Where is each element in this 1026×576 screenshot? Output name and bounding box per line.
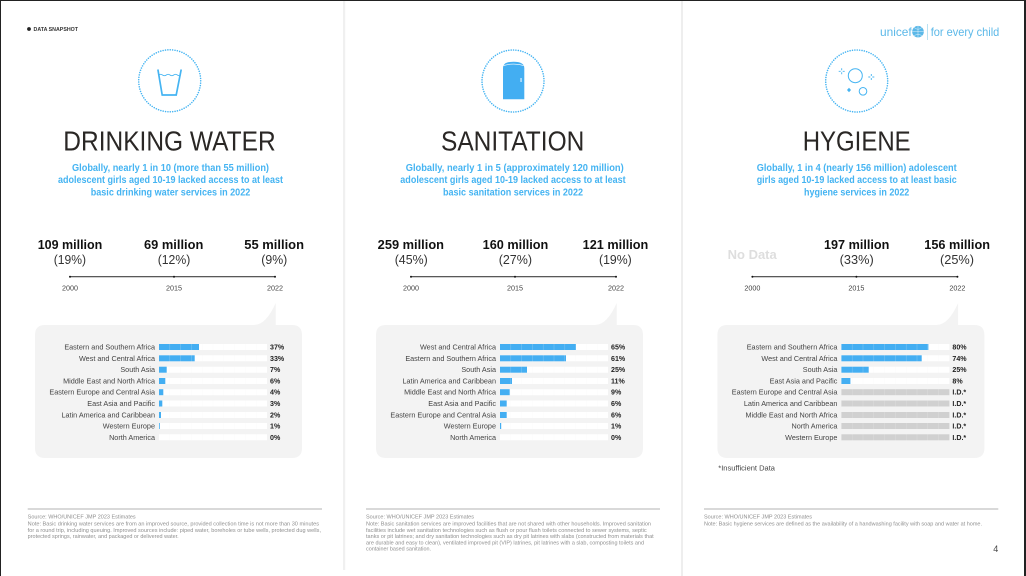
footnote: drinking water source and note: Note: Basic drinking water services are from an improved source, provided collection time is not more than 30 minutes	[28, 522, 320, 528]
text block: drinking water summary: adolescent girls aged 10-19 lacked access to at least	[58, 175, 284, 186]
bar chart: hygiene by region: 74%	[952, 355, 967, 363]
footnote: drinking water source and note: for a round trip, including queuing. Improved sources include: piped water, boreholes or tube wells, protected dug wells,	[28, 528, 321, 534]
timeline: drinking water: (19%)	[54, 253, 86, 267]
bar chart: sanitation by region: 6%	[611, 400, 622, 408]
bar chart: hygiene by region: Latin America and Caribbean	[744, 399, 837, 408]
bar chart: hygiene by region: I.D.*	[952, 422, 966, 430]
timeline: hygiene: 156 million	[924, 238, 990, 252]
bar chart: sanitation by region: 1%	[611, 422, 622, 430]
bar chart: drinking water by region: Middle East and North Africa	[63, 376, 156, 386]
bar chart: sanitation by region	[376, 303, 643, 458]
bar chart: drinking water by region: Eastern and Southern Africa	[64, 342, 156, 352]
timeline: sanitation: (45%)	[395, 253, 428, 267]
timeline: sanitation: (27%)	[499, 253, 532, 267]
heading: sanitation: SANITATION	[441, 126, 584, 157]
bar chart: drinking water by region: 7%	[270, 366, 281, 374]
bar chart: sanitation by region: North America	[450, 433, 497, 442]
bar chart: sanitation by region: West and Central Africa	[420, 342, 497, 352]
text block: sanitation summary: adolescent girls aged 10-19 lacked access to at least	[400, 175, 626, 186]
timeline: hygiene: 2015	[848, 284, 864, 293]
bar chart: drinking water by region	[35, 303, 302, 458]
text block: hygiene summary	[757, 163, 957, 198]
bar chart: sanitation by region: Middle East and North Africa	[404, 388, 497, 397]
timeline: drinking water: 2000	[62, 284, 78, 293]
text block: hygiene summary: hygiene services in 2022	[804, 187, 910, 198]
bar chart: sanitation by region: 25%	[611, 366, 626, 374]
timeline: hygiene: No Data	[728, 248, 778, 262]
timeline: sanitation: 2022	[608, 284, 624, 293]
timeline: drinking water: 69 million	[144, 238, 203, 252]
bar chart: drinking water by region: 4%	[270, 389, 281, 397]
bar chart: hygiene by region: South Asia	[803, 365, 838, 374]
icon: soap bubbles	[826, 50, 888, 112]
bar chart: hygiene by region: North America	[791, 422, 838, 430]
footnote: sanitation source and note: Source: WHO/UNICEF JMP 2023 Estimates	[366, 514, 475, 520]
bar chart: hygiene by region: 25%	[952, 366, 967, 374]
bar chart: drinking water by region: 3%	[270, 400, 281, 408]
timeline: drinking water: 2022	[267, 284, 283, 293]
note: insufficient data: *Insufficient Data	[718, 466, 775, 472]
bar chart: drinking water by region: 37%	[270, 344, 285, 352]
bar chart: drinking water by region: West and Central Africa	[79, 354, 156, 363]
timeline: sanitation: 121 million	[583, 238, 648, 252]
bar chart: hygiene by region: I.D.*	[952, 400, 966, 408]
footnote: drinking water source and note: protected springs, rainwater, and packaged or delivered water.	[28, 534, 179, 540]
footnote: sanitation source and note	[366, 508, 660, 553]
logo: unicef for every child: unicef	[880, 25, 912, 39]
bar chart: drinking water by region: 2%	[270, 412, 281, 420]
bar chart: hygiene by region	[717, 303, 984, 458]
timeline: drinking water: (9%)	[261, 253, 287, 267]
bar chart: sanitation by region: 6%	[611, 412, 622, 420]
text block: sanitation summary	[400, 163, 626, 198]
bar chart: sanitation by region: Eastern and Southern Africa	[405, 354, 497, 363]
bar chart: sanitation by region: East Asia and Pacific	[428, 399, 496, 408]
text block: drinking water summary	[58, 163, 284, 198]
section label: data snapshot: DATA SNAPSHOT	[34, 27, 78, 33]
timeline: hygiene: (25%)	[940, 253, 974, 267]
text block: sanitation summary: basic sanitation services in 2022	[443, 187, 583, 198]
footnote: sanitation source and note: are durable and easy to clean), ventilated improved pit (VIP) latrines, pit latrines with a slab, composting toilets and	[366, 540, 644, 546]
footnote: sanitation source and note: tanks or pit latrines; and dry sanitation technologies such as dry pit latrines with slabs (constructed from materials that	[366, 534, 654, 540]
heading: drinking water: DRINKING WATER	[63, 126, 276, 157]
bar chart: hygiene by region: Eastern and Southern Africa	[747, 342, 838, 352]
timeline: hygiene: 2022	[949, 284, 965, 293]
bar chart: hygiene by region: I.D.*	[952, 434, 966, 442]
timeline: drinking water: (12%)	[158, 253, 190, 267]
bar chart: drinking water by region: 0%	[270, 434, 281, 442]
panel: hygiene	[704, 50, 998, 528]
page number: 4	[993, 544, 998, 554]
timeline: sanitation: 2000	[403, 284, 419, 293]
text block: hygiene summary: Globally, 1 in 4 (nearly 156 million) adolescent	[757, 163, 957, 174]
bar chart: sanitation by region: Eastern Europe and Central Asia	[390, 410, 497, 420]
timeline: sanitation: 2015	[507, 284, 523, 293]
footnote: drinking water source and note	[28, 508, 322, 540]
bar chart: drinking water by region: 33%	[270, 355, 285, 363]
bar chart: drinking water by region: Western Europe	[103, 422, 155, 430]
icon: toilet door	[482, 50, 544, 112]
bar chart: drinking water by region: South Asia	[120, 365, 156, 374]
icon: water glass	[139, 50, 201, 112]
bar chart: hygiene by region: 80%	[952, 344, 967, 352]
bar chart: drinking water by region: 1%	[270, 422, 281, 430]
bar chart: sanitation by region: Western Europe	[444, 422, 496, 430]
timeline: drinking water	[38, 238, 304, 293]
timeline: drinking water: 2015	[166, 284, 182, 293]
timeline: hygiene: 2000	[744, 284, 760, 293]
bar chart: sanitation by region: Latin America and Caribbean	[402, 376, 496, 386]
bar chart: hygiene by region: Western Europe	[785, 433, 837, 442]
text block: sanitation summary: Globally, nearly 1 in 5 (approximately 120 million)	[406, 163, 624, 174]
bar chart: drinking water by region: North America	[109, 433, 156, 442]
footnote: sanitation source and note: Note: Basic sanitation services are improved facilities that are not shared with other households. Improved sanitation	[366, 522, 651, 528]
text block: drinking water summary: basic drinking water services in 2022	[91, 187, 251, 198]
timeline: sanitation	[378, 238, 648, 293]
text block: drinking water summary: Globally, nearly 1 in 10 (more than 55 million)	[72, 163, 269, 174]
bar chart: hygiene by region: 8%	[952, 378, 963, 386]
bar chart: hygiene by region: Middle East and North Africa	[746, 410, 838, 420]
timeline: hygiene	[728, 238, 990, 293]
timeline: hygiene: 197 million	[824, 238, 889, 252]
bar chart: hygiene by region: East Asia and Pacific	[770, 376, 838, 386]
footnote: hygiene source and note: Source: WHO/UNICEF JMP 2023 Estimates	[704, 514, 813, 520]
heading: hygiene: HYGIENE	[803, 126, 911, 157]
bar chart: sanitation by region: South Asia	[461, 365, 497, 374]
footnote: sanitation source and note: container based sanitation.	[366, 547, 431, 553]
bar chart: drinking water by region: Latin America and Caribbean	[61, 410, 155, 420]
bar chart: hygiene by region: I.D.*	[952, 412, 966, 420]
bar chart: sanitation by region: 0%	[611, 434, 622, 442]
timeline: drinking water: 55 million	[244, 238, 304, 252]
footnote: sanitation source and note: facilities include wet sanitation technologies such as flush or pour flush toilets connected to sewer systems, septic	[366, 528, 647, 534]
logo: unicef for every child: for every child	[931, 25, 999, 39]
bar chart: sanitation by region: 61%	[611, 355, 626, 363]
timeline: sanitation: (19%)	[599, 253, 632, 267]
panel: sanitation	[366, 50, 660, 553]
footnote: hygiene source and note	[704, 508, 998, 528]
text block: hygiene summary: girls aged 10-19 lacked access to at least basic	[757, 175, 957, 186]
bar chart: sanitation by region: 9%	[611, 389, 622, 397]
bar chart: sanitation by region: 11%	[611, 378, 625, 386]
timeline: sanitation: 160 million	[483, 238, 548, 252]
timeline: sanitation: 259 million	[378, 238, 444, 252]
footnote: drinking water source and note: Source: WHO/UNICEF JMP 2023 Estimates	[28, 514, 136, 520]
timeline: drinking water: 109 million	[38, 238, 102, 252]
bar chart: hygiene by region: West and Central Africa	[761, 354, 838, 363]
panel: drinking water	[28, 50, 322, 540]
bar chart: hygiene by region: I.D.*	[952, 389, 966, 397]
bar chart: drinking water by region: 6%	[270, 378, 281, 386]
bar chart: drinking water by region: Eastern Europe and Central Asia	[49, 388, 156, 397]
timeline: hygiene: (33%)	[840, 253, 874, 267]
footnote: hygiene source and note: Note: Basic hygiene services are defined as the availability of a handwashing facility with soap and water at home.	[704, 522, 982, 528]
logo: unicef for every child	[880, 24, 999, 40]
bar chart: sanitation by region: 65%	[611, 344, 626, 352]
bar chart: drinking water by region: East Asia and Pacific	[87, 399, 155, 408]
bar chart: hygiene by region: Eastern Europe and Central Asia	[732, 388, 838, 397]
